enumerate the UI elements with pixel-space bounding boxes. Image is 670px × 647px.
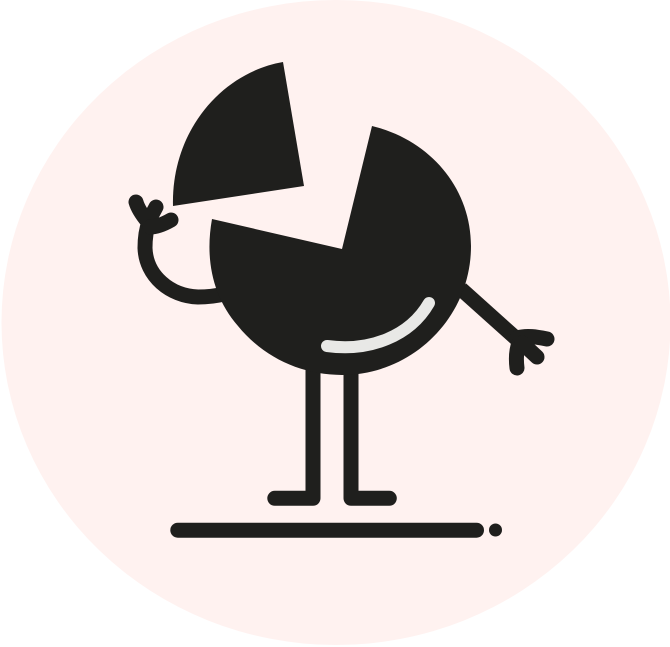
left arm with hand <box>136 202 224 297</box>
character <box>136 202 547 530</box>
detached pie slice <box>173 62 304 206</box>
main pie body <box>209 126 471 375</box>
right arm with hand <box>461 289 547 368</box>
body highlight <box>327 303 429 347</box>
ground line <box>178 523 477 538</box>
legs and feet <box>275 370 389 498</box>
ground dot <box>489 524 502 536</box>
